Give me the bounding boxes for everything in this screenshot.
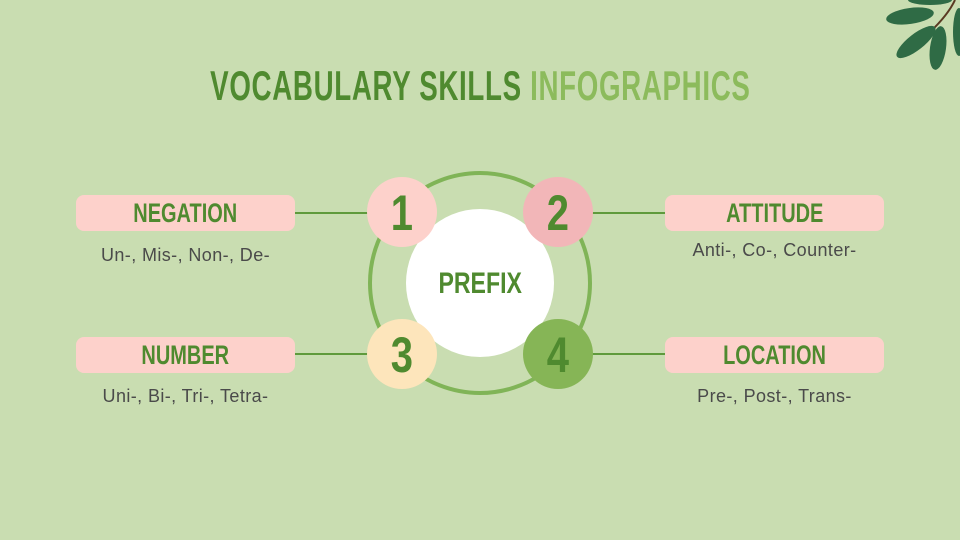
number 1 xyxy=(367,177,437,247)
number 1: 1 xyxy=(391,185,413,241)
text: location: Pre-, Post-, Trans- xyxy=(697,386,852,406)
panel: attitude: ATTITUDE xyxy=(726,198,823,228)
text: negation: Un-, Mis-, Non-, De- xyxy=(101,245,270,265)
number 3 xyxy=(367,319,437,389)
panel: location: LOCATION xyxy=(723,340,826,370)
title: VOCABULARY SKILLS INFOGRAPHICS xyxy=(210,62,750,109)
number 3: 3 xyxy=(391,327,413,383)
panel: negation: NEGATION xyxy=(134,198,237,228)
text: attitude: Anti-, Co-, Counter- xyxy=(692,240,857,260)
number 4 xyxy=(523,319,593,389)
icon: leaves xyxy=(886,0,960,70)
number 2 xyxy=(523,177,593,247)
panel: location xyxy=(665,337,884,373)
center circle: prefix: PREFIX xyxy=(438,267,522,300)
panel: negation xyxy=(76,195,295,231)
panel: attitude xyxy=(665,195,884,231)
panel: number: NUMBER xyxy=(142,340,229,370)
text: number: Uni-, Bi-, Tri-, Tetra- xyxy=(103,386,268,406)
panel: number xyxy=(76,337,295,373)
number 2: 2 xyxy=(547,185,569,241)
center circle: prefix xyxy=(406,209,554,357)
number 4: 4 xyxy=(547,327,569,383)
